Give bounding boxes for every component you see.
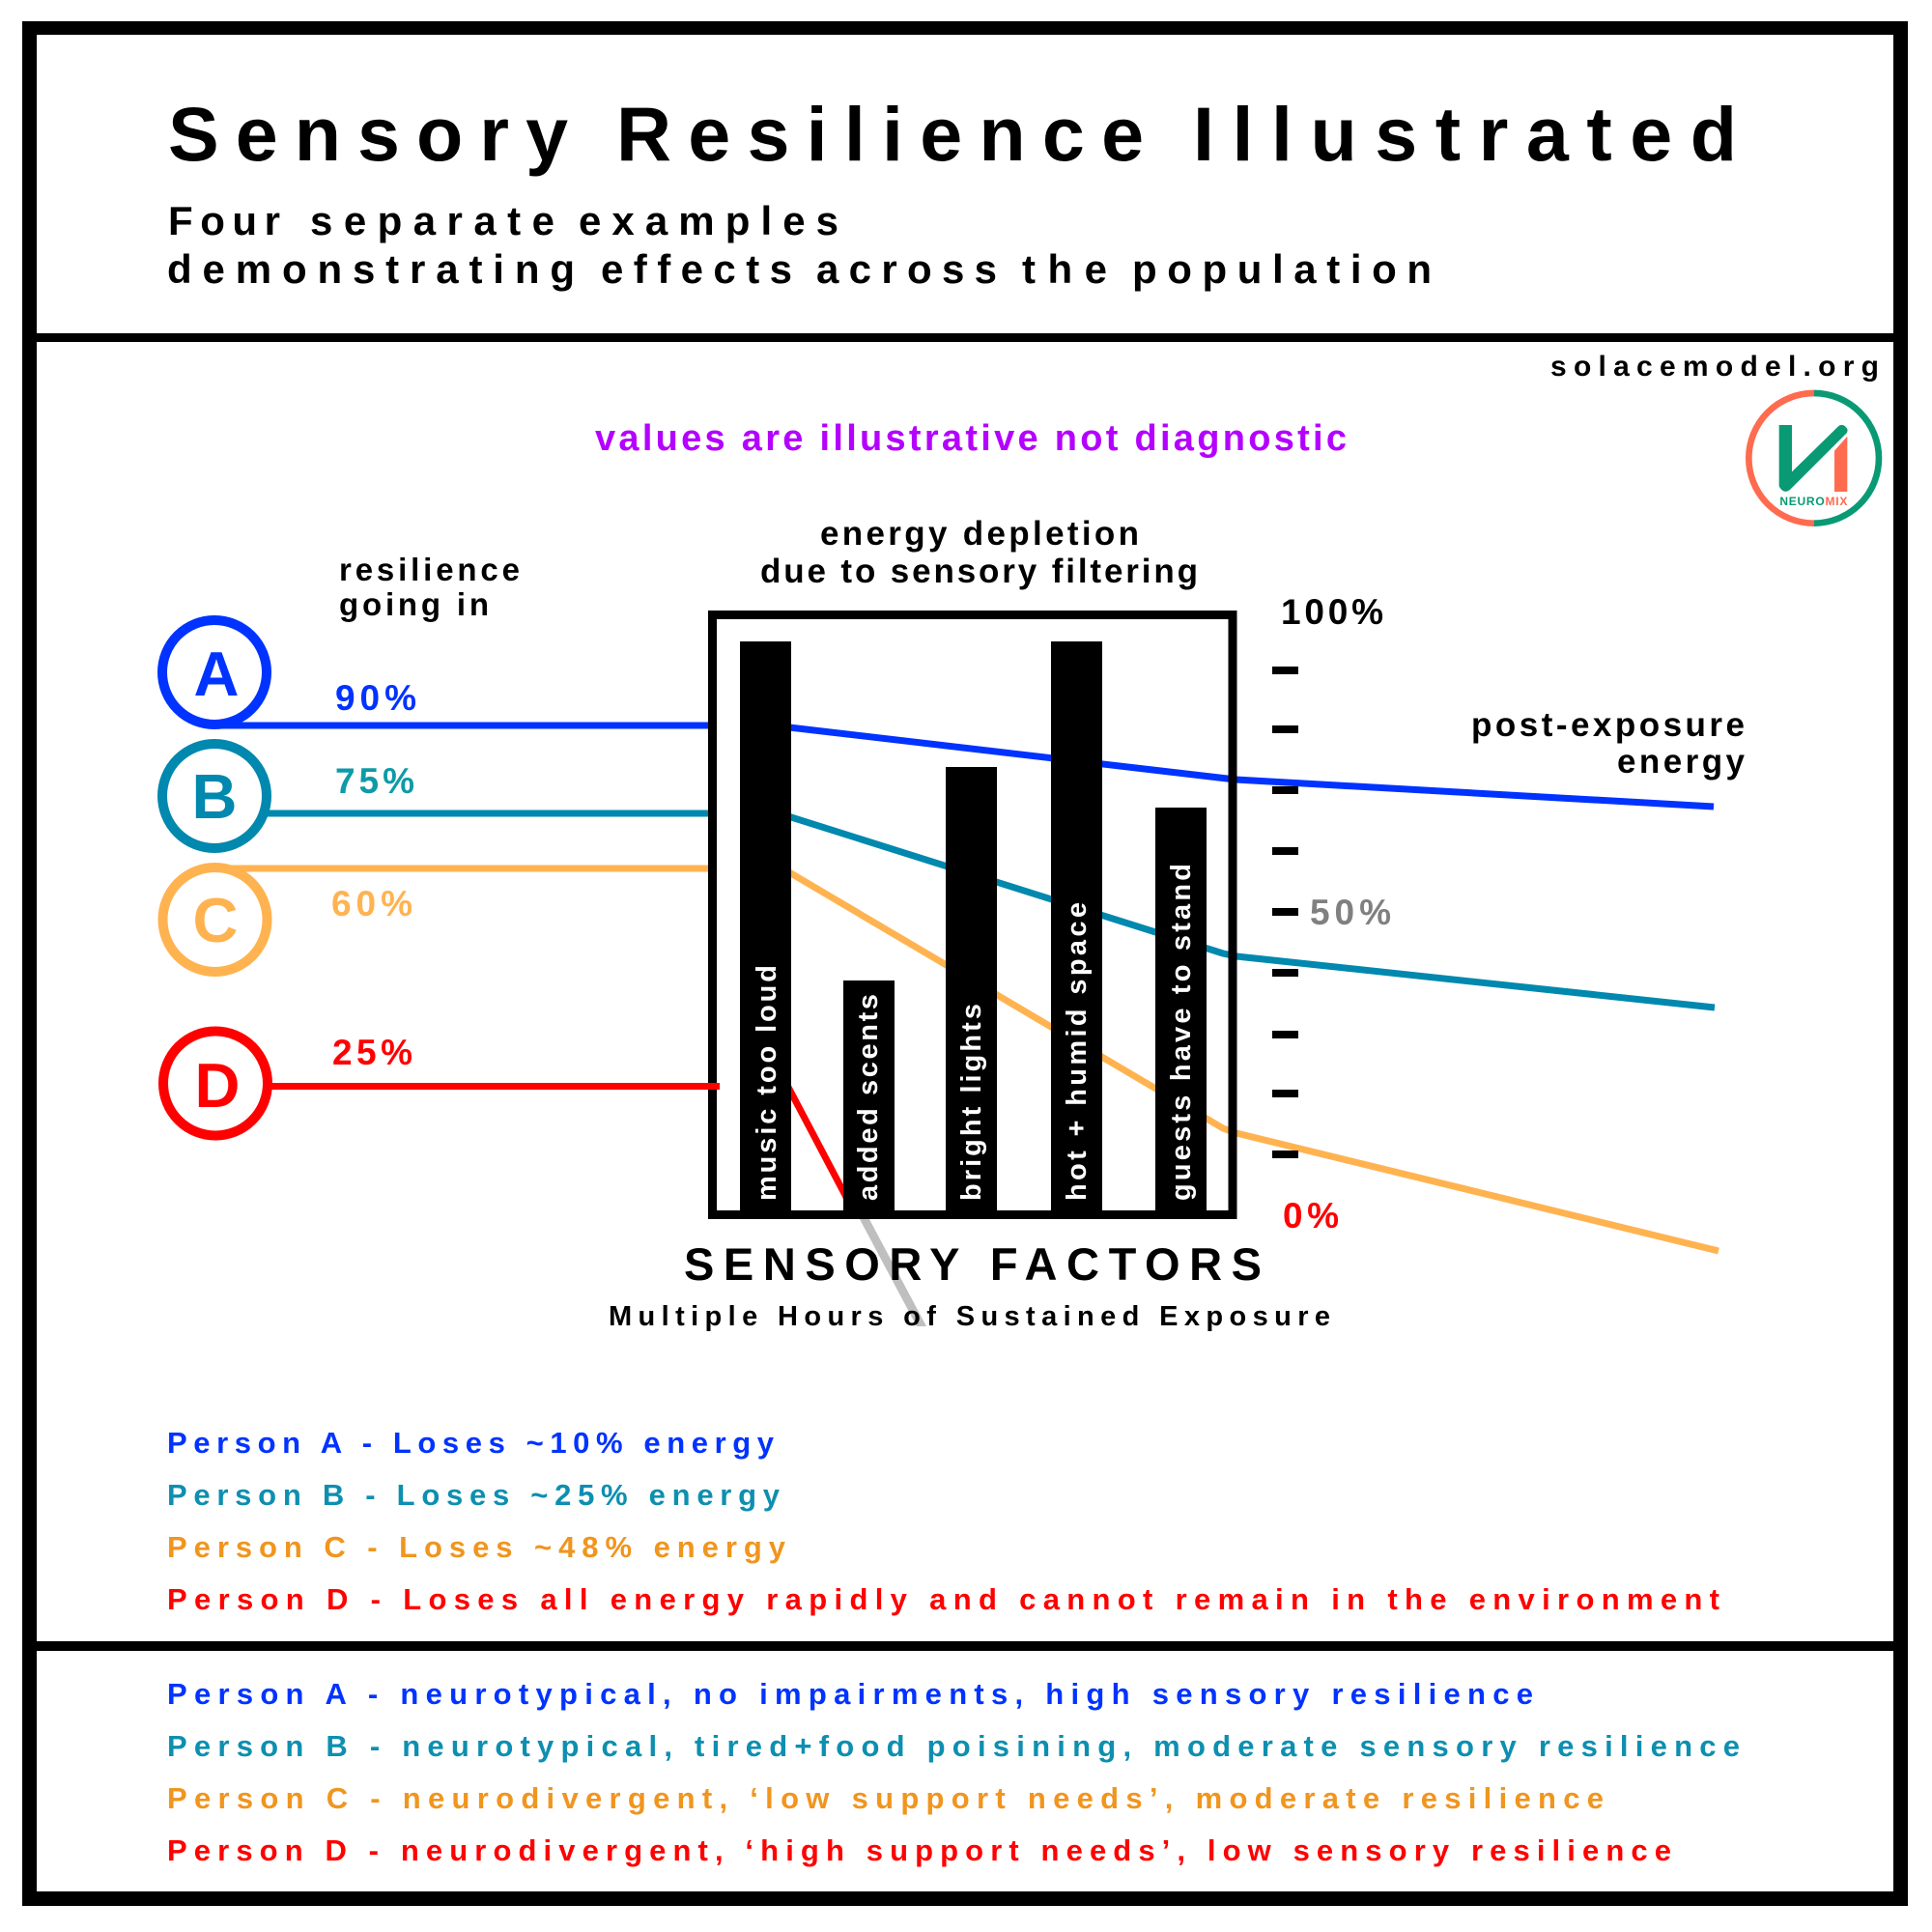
starting values: 90%	[335, 678, 416, 718]
line: person D trajectory	[773, 1058, 848, 1201]
heading: resilience going in: going in	[339, 586, 489, 622]
bar chart: sensory factors: guests have to stand	[1166, 864, 1197, 1201]
subtitle: separate	[310, 198, 554, 243]
bar chart: sensory factors	[740, 641, 1207, 1211]
scale labels: 50%	[1310, 893, 1391, 932]
title: Resilience	[616, 91, 1144, 177]
badge: person A	[162, 620, 267, 724]
axis title	[609, 1238, 1330, 1332]
icon: neuromix logo	[1748, 393, 1879, 524]
subtitle: demonstrating	[167, 246, 575, 292]
list: person profiles: Person C - neurodivergent, ‘low support needs’, moderate resilience	[167, 1781, 1604, 1815]
starting values: 25%	[332, 1033, 412, 1072]
label: post-exposure energy: energy	[1617, 743, 1746, 781]
heading: resilience going in: resilience	[339, 552, 520, 587]
heading: energy depletion: due to sensory filtering	[760, 553, 1198, 590]
bar chart: sensory factors: music too loud	[752, 965, 782, 1201]
list: person profiles: Person B - neurotypical, tired+food poisining, moderate sensory resilience	[167, 1729, 1740, 1763]
list: person profiles	[167, 1677, 1740, 1867]
title: Sensory	[168, 91, 568, 177]
list: energy loss per person: Person A - Loses ~10% energy	[167, 1426, 775, 1460]
chart frame	[713, 614, 1233, 1215]
bar chart: sensory factors: bright lights	[956, 1004, 987, 1201]
subtitle: effects	[601, 246, 792, 292]
badge: person C	[162, 867, 267, 972]
scale labels: 100%	[1281, 592, 1383, 632]
note: illustrative values: values are illustrative not diagnostic	[595, 418, 1347, 459]
subtitle	[167, 198, 1432, 292]
starting values: 75%	[335, 761, 414, 801]
badge: person C: C	[193, 885, 238, 955]
bar chart: sensory factors: hot + humid space	[1062, 902, 1093, 1201]
subtitle: examples	[579, 198, 838, 243]
subtitle: across	[816, 246, 997, 292]
title	[168, 91, 1737, 177]
starting values: 60%	[331, 884, 412, 923]
bar chart: sensory factors: added scents	[853, 994, 884, 1201]
line: person A trajectory	[214, 725, 1714, 807]
badge: person B	[162, 744, 267, 848]
badge: person D: D	[195, 1050, 240, 1121]
badge: person A: A	[194, 639, 239, 709]
scale labels	[1281, 592, 1391, 1236]
line: person D entry over frame	[270, 1083, 720, 1090]
icon: neuromix logo: NEUROMIX	[1779, 495, 1847, 508]
line: person B trajectory	[266, 811, 1715, 1008]
badge: person B: B	[192, 761, 237, 832]
list: person profiles: Person D - neurodivergent, ‘high support needs’, low sensory resilience	[167, 1833, 1671, 1867]
list: energy loss per person: Person B - Loses ~25% energy	[167, 1478, 781, 1512]
list: person profiles: Person A - neurotypical, no impairments, high sensory resilience	[167, 1677, 1533, 1711]
heading: resilience going in	[339, 552, 520, 622]
list: energy loss per person: Person D - Loses all energy rapidly and cannot remain in the environment	[167, 1582, 1719, 1616]
scale labels: 0%	[1283, 1196, 1339, 1236]
heading: energy depletion	[760, 515, 1198, 590]
label: post-exposure energy: post-exposure	[1471, 706, 1745, 744]
label: post-exposure energy	[1471, 706, 1746, 781]
heading: energy depletion: energy depletion	[820, 515, 1139, 553]
energy scale ticks	[1272, 667, 1298, 1158]
list: energy loss per person: Person C - Loses ~48% energy	[167, 1530, 786, 1564]
subtitle: Four	[168, 198, 280, 243]
line: person C trajectory	[214, 863, 1719, 1251]
list: energy loss per person	[167, 1426, 1719, 1616]
title: Illustrated	[1193, 91, 1737, 177]
badge: person D	[163, 1032, 268, 1136]
subtitle: the	[1022, 246, 1107, 292]
starting values	[331, 678, 416, 1072]
axis title: SENSORY FACTORS	[684, 1238, 1262, 1290]
line: gray continuation below person D	[845, 1192, 926, 1326]
subtitle: population	[1132, 246, 1432, 292]
axis title: Multiple Hours of Sustained Exposure	[609, 1301, 1330, 1332]
website url: solacemodel.org	[1550, 351, 1879, 383]
